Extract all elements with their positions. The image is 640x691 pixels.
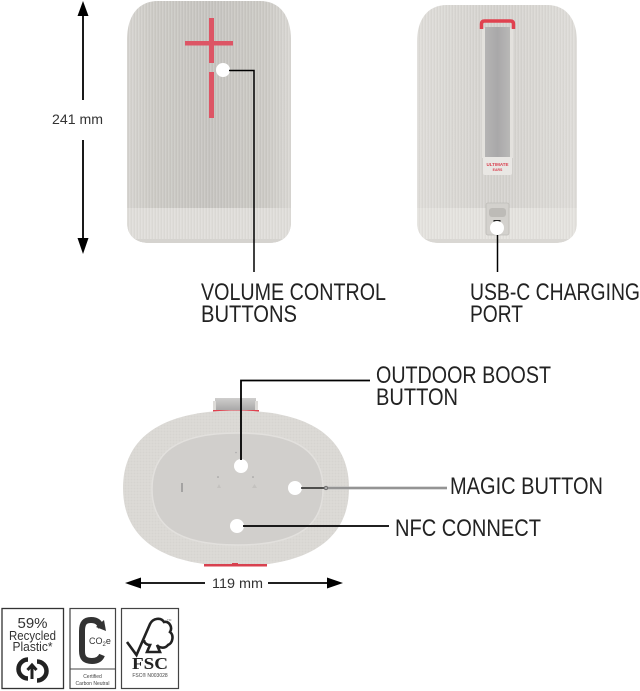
badge: certified carbon neutral: Carbon Neutral [76, 681, 109, 687]
badge: FSC: FSC® N003028 [132, 672, 168, 679]
port cover [486, 203, 509, 235]
callout: usb-c charging port [470, 221, 640, 328]
badge: certified carbon neutral: e [106, 636, 111, 646]
grille texture [123, 410, 349, 566]
dimension: height 241 mm [52, 1, 103, 254]
icon: tree check [127, 619, 172, 655]
badge: certified carbon neutral: 2 [102, 642, 106, 648]
inner base [152, 433, 323, 545]
dimension: width 119 mm [125, 575, 343, 591]
handle [213, 398, 259, 413]
badge: 59% recycled plastic [2, 608, 64, 688]
strap tag: ULTIMATE [486, 162, 509, 167]
strap tag: EARS [493, 168, 503, 172]
icon: volume minus [209, 72, 214, 118]
strap [485, 27, 510, 161]
badge: 59% recycled plastic: 59% [17, 615, 48, 632]
icon: recycle loop [18, 660, 46, 680]
badge: certified carbon neutral: CO [89, 636, 102, 646]
badge: 59% recycled plastic: Recycled [9, 629, 56, 643]
icon: C arrow [82, 620, 102, 661]
outer grille [123, 410, 349, 566]
red bottom strip [204, 564, 267, 566]
callout: volume control buttons: BUTTONS [201, 301, 297, 328]
callout: volume control buttons: VOLUME CONTROL [201, 279, 386, 306]
badge: 59% recycled plastic: Plastic* [12, 640, 53, 654]
dimension: height 241 mm: 241 mm [52, 111, 103, 127]
callout: usb-c charging port: PORT [470, 301, 523, 328]
badge: certified carbon neutral [70, 608, 116, 688]
callout: outdoor boost button: BUTTON [376, 384, 458, 411]
badge: FSC: TM [167, 618, 172, 622]
callout: outdoor boost button [234, 362, 551, 473]
callout: nfc connect: NFC CONNECT [395, 515, 541, 542]
badge: FSC: FSC [132, 654, 168, 673]
badge: certified carbon neutral: Certified [83, 674, 102, 680]
badge: FSC [122, 608, 178, 688]
callout: magic button [288, 473, 603, 500]
callout: volume control buttons [201, 63, 386, 328]
strap channel [482, 28, 513, 158]
strap tag [483, 157, 512, 175]
callout: outdoor boost button: OUTDOOR BOOST [376, 362, 551, 389]
speaker: front view [127, 1, 291, 244]
small marks [182, 452, 257, 492]
speaker: back view [417, 5, 577, 244]
speaker: top view [123, 398, 349, 566]
callout: magic button: MAGIC BUTTON [450, 473, 603, 500]
callout: nfc connect [230, 515, 541, 542]
icon: volume plus [185, 18, 233, 63]
icon: red handle [482, 21, 514, 29]
dimension: width 119 mm: 119 mm [212, 575, 263, 591]
